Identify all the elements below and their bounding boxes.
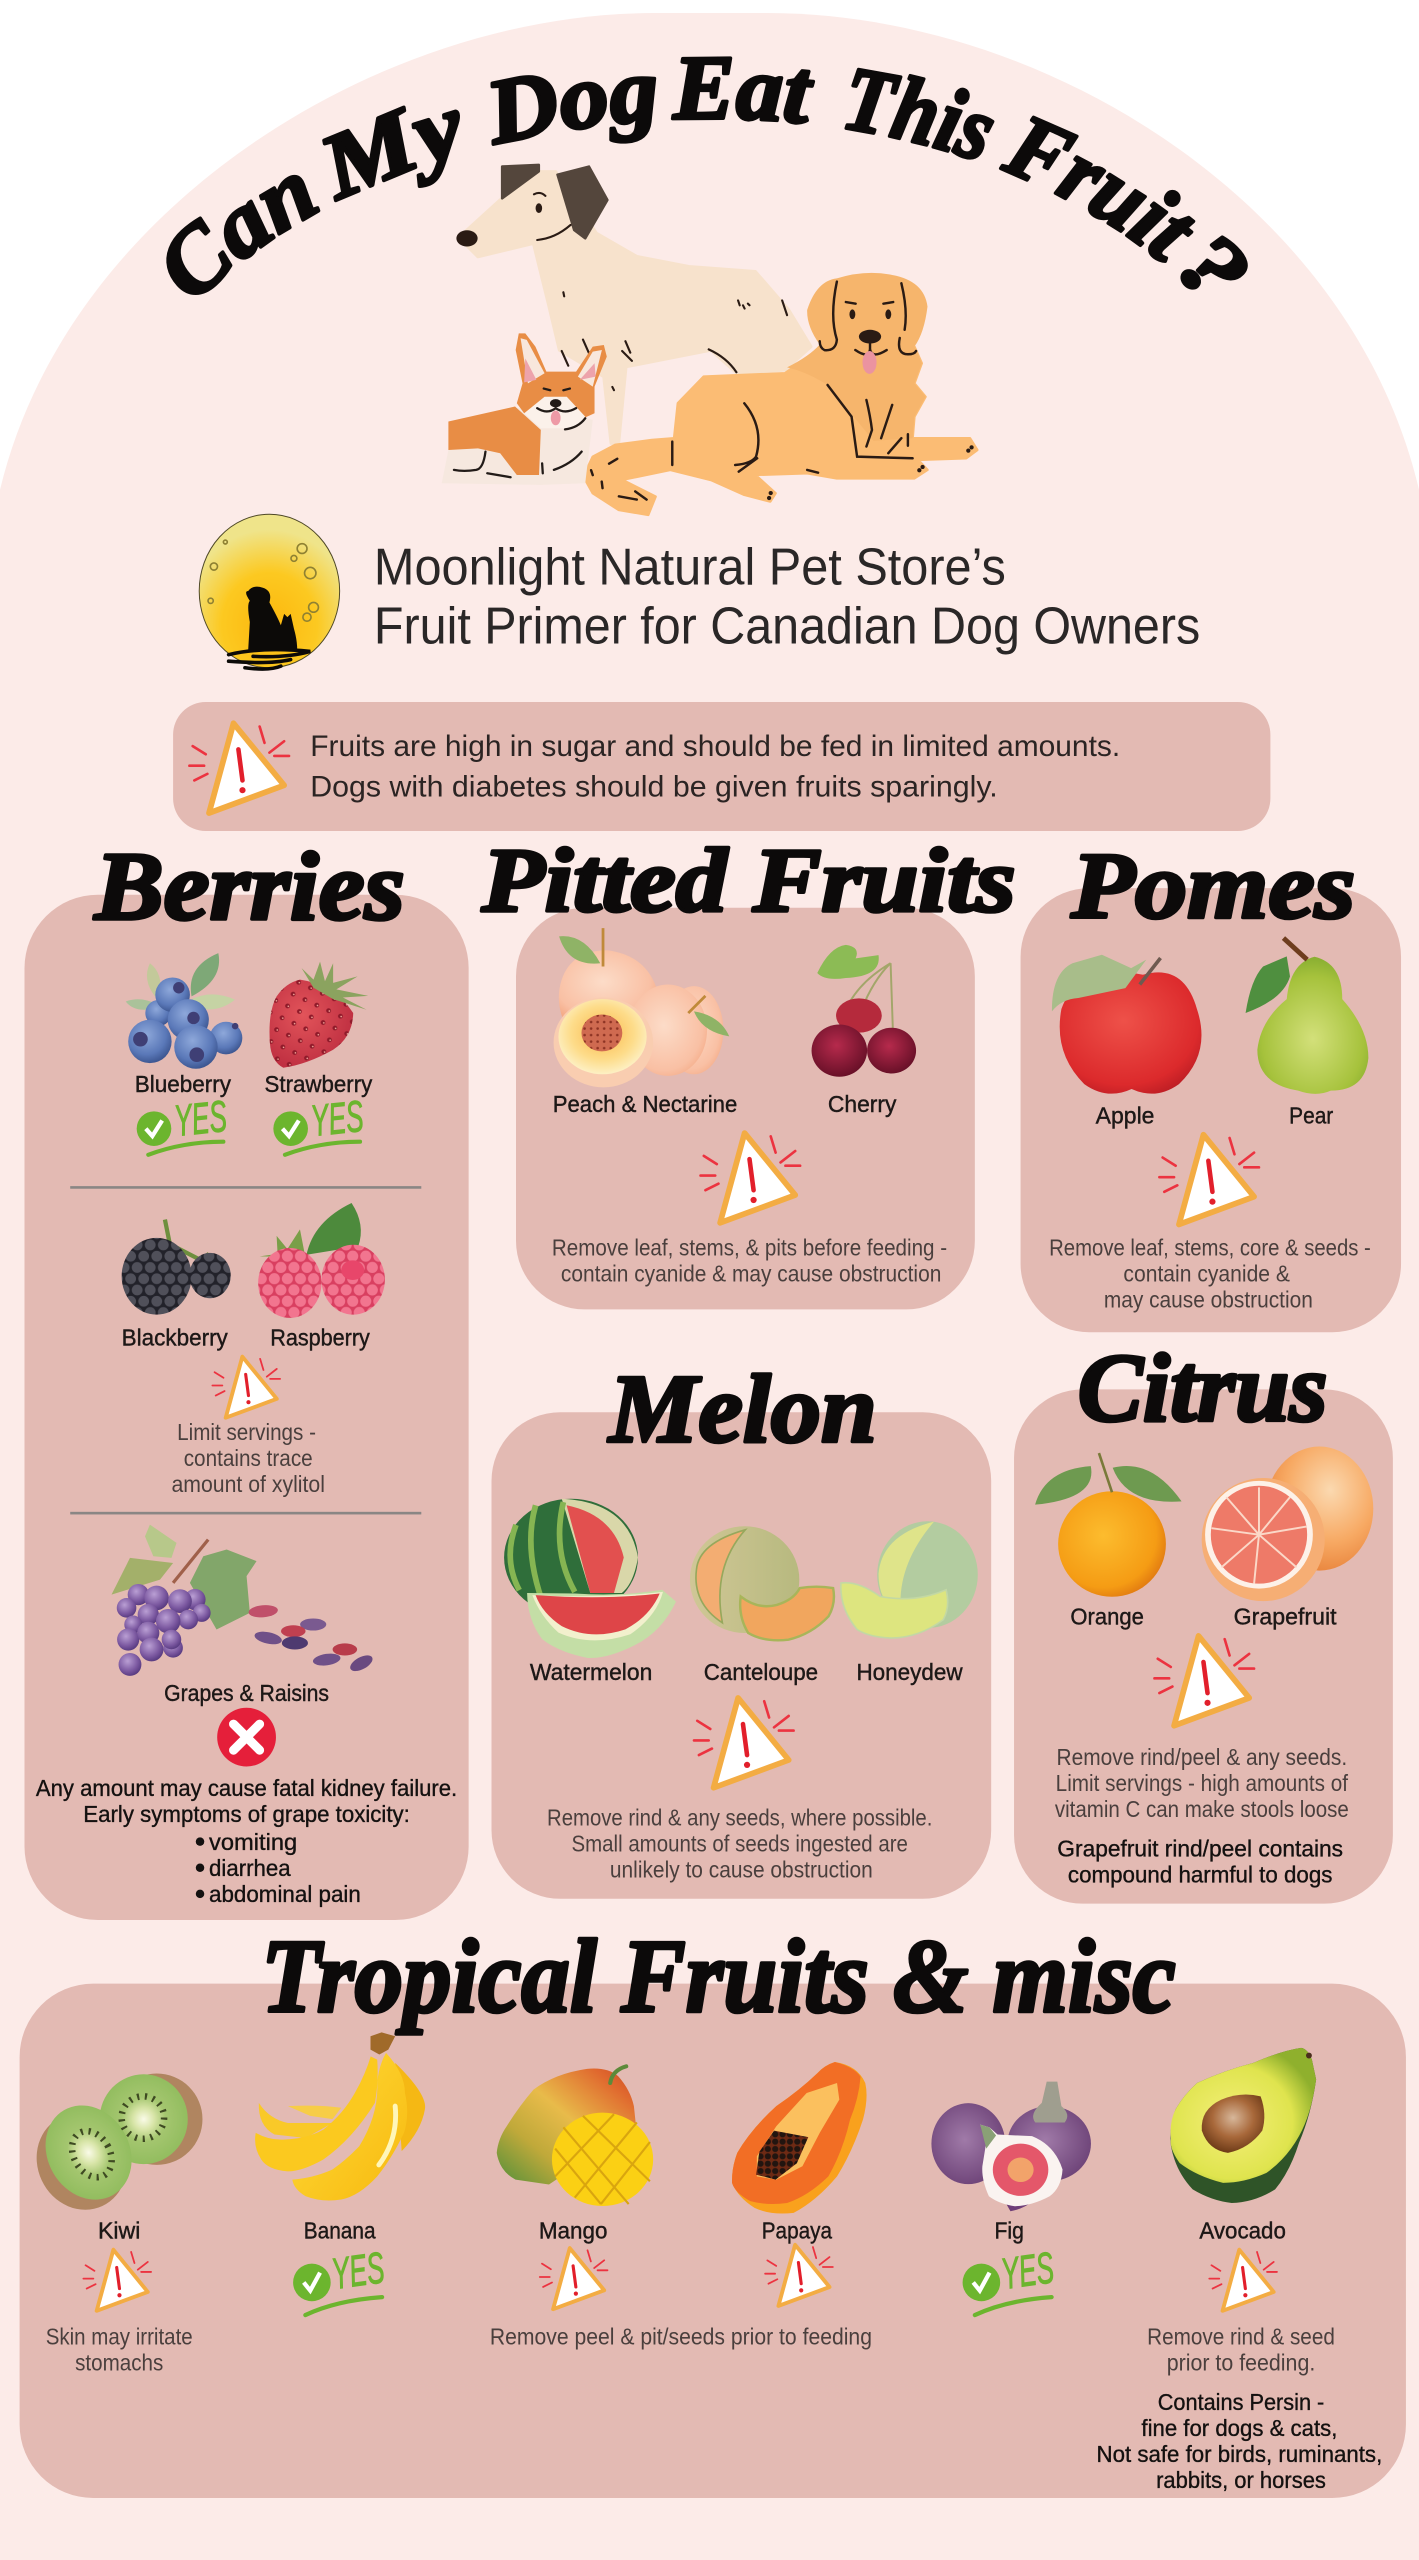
icon: yes strawberry	[273, 1092, 366, 1155]
note: avocado	[1147, 2323, 1335, 2376]
label: canteloupe: Canteloupe	[704, 1659, 818, 1685]
note: grape toxicity: diarrhea	[209, 1855, 291, 1881]
icon: danger cross	[217, 1708, 276, 1767]
icon: yes blueberry: YES	[172, 1092, 229, 1146]
fruit: canteloupe	[690, 1526, 834, 1640]
icon: yes banana	[293, 2243, 387, 2315]
note: grapefruit warning: Grapefruit rind/peel contains	[1057, 1835, 1343, 1861]
fruit: peach and nectarine	[554, 928, 729, 1087]
note: pomes	[1049, 1235, 1371, 1313]
note: pitted fruits	[552, 1235, 947, 1287]
subtitle: Moonlight Natural Pet Store’s	[374, 538, 1006, 596]
icon: caution	[701, 1133, 800, 1223]
note: persin warning	[1097, 2389, 1382, 2493]
label: cherry: Cherry	[828, 1091, 897, 1117]
label: apple: Apple	[1096, 1102, 1154, 1128]
fruit: grapefruit	[1202, 1447, 1373, 1601]
note: kiwi: Skin may irritate	[46, 2323, 193, 2349]
title: Dog	[490, 75, 656, 146]
callout: sugar warning: Fruits are high in sugar and should be fed in limited amounts.	[310, 730, 1120, 763]
note: persin warning: rabbits, or horses	[1156, 2467, 1326, 2493]
note: avocado: Remove rind & seed	[1147, 2323, 1335, 2349]
dog: golden retriever	[583, 273, 977, 515]
icon: yes fig: YES	[998, 2243, 1057, 2299]
panel: melon	[492, 1356, 991, 1899]
fruit: avocado	[1171, 2048, 1316, 2203]
panel: tropical fruits and misc: Tropical Fruits & misc	[261, 1918, 1176, 2034]
note: limit servings: Limit servings -	[177, 1419, 316, 1445]
note: kiwi: stomachs	[75, 2350, 163, 2376]
label: peach and nectarine: Peach & Nectarine	[553, 1091, 737, 1117]
label: strawberry: Strawberry	[265, 1071, 373, 1097]
note: grapefruit warning: compound harmful to dogs	[1068, 1861, 1332, 1887]
fruit: raspberry	[258, 1203, 385, 1318]
note: melon: Remove rind & any seeds, where possible.	[547, 1804, 932, 1830]
panel: berries: Berries	[94, 833, 405, 941]
note: limit servings: contains trace	[184, 1445, 313, 1471]
note: melon: unlikely to cause obstruction	[610, 1857, 873, 1883]
fruit: blackberry	[122, 1220, 231, 1315]
title: Can	[166, 174, 320, 295]
icon: yes blueberry	[137, 1092, 229, 1155]
note: grapefruit warning	[1057, 1835, 1343, 1887]
label: honeydew: Honeydew	[856, 1659, 963, 1685]
dog: tall cream dog	[456, 165, 811, 443]
title: Eat	[670, 56, 816, 125]
fruit: orange	[1035, 1453, 1182, 1597]
label: pear: Pear	[1289, 1102, 1334, 1128]
note: limit servings	[171, 1419, 325, 1497]
callout: sugar warning: Dogs with diabetes should be given fruits sparingly.	[310, 771, 998, 804]
label: papaya: Papaya	[762, 2217, 832, 2243]
label: grapes and raisins: Grapes & Raisins	[164, 1680, 329, 1706]
note: pomes: Remove leaf, stems, core & seeds -	[1049, 1235, 1371, 1261]
icon: caution mango	[540, 2248, 608, 2309]
fruit: banana	[255, 2032, 425, 2200]
logo: moon with pet silhouette	[199, 514, 340, 669]
fruit: papaya	[732, 2062, 867, 2214]
icon: caution avocado	[1209, 2250, 1277, 2311]
note: grape toxicity: abdominal pain	[209, 1881, 361, 1907]
subtitle: Fruit Primer for Canadian Dog Owners	[374, 597, 1200, 655]
note: citrus: Remove rind/peel & any seeds.	[1056, 1744, 1347, 1770]
label: blueberry: Blueberry	[135, 1071, 232, 1097]
subtitle	[374, 538, 1200, 655]
panel: pomes	[1021, 835, 1401, 1332]
note: citrus: vitamin C can make stools loose	[1055, 1796, 1349, 1822]
title: Fruit	[998, 116, 1196, 263]
label: mango: Mango	[539, 2217, 607, 2243]
panel: melon: Melon	[607, 1356, 877, 1464]
fruit: mango	[497, 2066, 653, 2206]
icon: caution kiwi	[83, 2250, 151, 2311]
fruit: pear	[1246, 938, 1368, 1094]
label: raspberry: Raspberry	[270, 1324, 370, 1350]
panel: pomes: Pomes	[1070, 835, 1355, 939]
dog: corgi	[442, 333, 607, 485]
note: kiwi	[46, 2323, 193, 2376]
title: ?	[1180, 235, 1248, 290]
label: grapefruit: Grapefruit	[1234, 1603, 1337, 1629]
label: orange: Orange	[1070, 1603, 1144, 1629]
panel: tropical fruits and misc	[20, 1918, 1406, 2498]
note: citrus	[1055, 1744, 1349, 1822]
panel: pitted fruits: Pitted Fruits	[481, 830, 1016, 931]
label: banana: Banana	[304, 2217, 376, 2243]
note: persin warning: Contains Persin -	[1158, 2389, 1324, 2415]
title: My	[322, 106, 460, 202]
label: fig: Fig	[994, 2217, 1024, 2243]
icon: caution papaya	[765, 2245, 833, 2306]
icon: yes fig	[963, 2243, 1057, 2315]
note: grape toxicity: Any amount may cause fatal kidney failure.	[36, 1775, 457, 1801]
icon: caution	[212, 1357, 280, 1418]
label: kiwi: Kiwi	[98, 2217, 140, 2243]
note: citrus: Limit servings - high amounts of	[1056, 1770, 1349, 1796]
label: blackberry: Blackberry	[122, 1324, 228, 1350]
note: limit servings: amount of xylitol	[171, 1471, 325, 1497]
note: grape toxicity: Early symptoms of grape toxicity:	[83, 1801, 410, 1827]
note: melon	[547, 1804, 932, 1883]
note: pomes: contain cyanide &	[1123, 1261, 1290, 1287]
fruit: cherry	[812, 945, 916, 1077]
note: persin warning: Not safe for birds, ruminants,	[1097, 2441, 1382, 2467]
icon: caution	[694, 1698, 794, 1788]
note: persin warning: fine for dogs & cats,	[1141, 2415, 1337, 2441]
fruit: kiwi	[21, 2073, 202, 2225]
note: melon: Small amounts of seeds ingested are	[572, 1830, 908, 1856]
note: pitted fruits: contain cyanide & may cause obstruction	[561, 1261, 941, 1287]
fruit: blueberry	[126, 953, 242, 1069]
note: mango and papaya: Remove peel & pit/seeds prior to feeding	[490, 2323, 872, 2349]
fruit: grapes and raisins	[112, 1525, 375, 1676]
label: avocado: Avocado	[1199, 2217, 1286, 2243]
callout: sugar warning	[173, 702, 1270, 831]
note: pomes: may cause obstruction	[1104, 1287, 1313, 1313]
illustration: three dogs	[442, 165, 977, 515]
note: pitted fruits: Remove leaf, stems, & pits before feeding -	[552, 1235, 947, 1261]
title: This	[844, 68, 994, 160]
icon: caution	[1159, 1135, 1259, 1224]
icon: yes strawberry: YES	[309, 1092, 366, 1146]
panel: pitted fruits	[481, 830, 1016, 1309]
note: grape toxicity: vomiting	[209, 1829, 297, 1855]
panel: berries	[24, 833, 469, 1920]
fruit: fig	[931, 2082, 1091, 2211]
panel: citrus	[1014, 1334, 1393, 1904]
title	[166, 56, 1248, 295]
icon: yes banana: YES	[329, 2243, 387, 2299]
fruit: apple	[1052, 955, 1201, 1094]
fruit: watermelon	[504, 1499, 676, 1658]
panel: citrus: Citrus	[1078, 1334, 1328, 1442]
fruit: strawberry	[270, 962, 368, 1068]
icon: caution	[1154, 1636, 1254, 1726]
label: watermelon: Watermelon	[530, 1659, 652, 1685]
note: grape toxicity	[36, 1775, 457, 1907]
note: avocado: prior to feeding.	[1167, 2350, 1315, 2376]
fruit: honeydew	[841, 1521, 978, 1638]
